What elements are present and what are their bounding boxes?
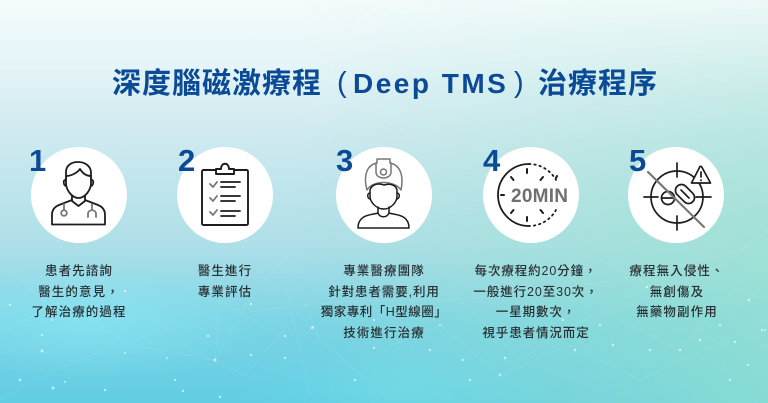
text 4: 視乎患者情況而定 (482, 326, 590, 340)
text 5 (629, 264, 725, 319)
text 5: 無創傷及 (650, 284, 704, 298)
step 2 (177, 143, 273, 298)
step 1 (29, 143, 127, 319)
text 1: 了解治療的過程 (31, 305, 127, 319)
text 1: 患者先諮詢 (45, 264, 113, 278)
circle 3 (336, 147, 432, 243)
text 4: 一星期數次， (496, 305, 576, 319)
number 3: 3 (336, 143, 353, 178)
text 1 (31, 264, 127, 319)
20MIN label: 20MIN (511, 186, 568, 207)
step 5 (628, 143, 725, 319)
title: ) (514, 67, 524, 99)
text 3 (321, 264, 447, 340)
text 3: 獨家專利「H型線圈」 (321, 305, 447, 319)
text 3: 技術進行治療 (343, 326, 425, 340)
text 1: 醫生的意見， (38, 284, 120, 298)
title: 深度腦磁激療程 (112, 68, 322, 100)
text 2 (198, 264, 252, 298)
number 1: 1 (29, 143, 46, 178)
number 5: 5 (629, 143, 646, 178)
title: Deep TMS (353, 68, 508, 99)
title: 治療程序 (538, 68, 658, 100)
text 4: 每次療程約20分鐘， (475, 264, 597, 278)
circle 2 (177, 147, 273, 243)
step 3 (321, 143, 447, 340)
text 3: 專業醫療團隊 (343, 264, 425, 278)
title: ( (337, 67, 347, 99)
circle 5 (628, 147, 724, 243)
text 5: 無藥物副作用 (636, 305, 718, 319)
text 3: 針對患者需要,利用 (328, 284, 440, 298)
circle 1 (31, 147, 127, 243)
text 2: 專業評估 (198, 284, 252, 298)
number 4: 4 (483, 143, 500, 178)
text 5: 療程無入侵性、 (629, 264, 725, 278)
text 4 (473, 264, 599, 340)
text 2: 醫生進行 (198, 264, 252, 278)
text 4: 一般進行20至30次， (473, 284, 599, 298)
step 4 (473, 143, 599, 340)
number 2: 2 (178, 143, 195, 178)
circle 4 (483, 147, 579, 243)
